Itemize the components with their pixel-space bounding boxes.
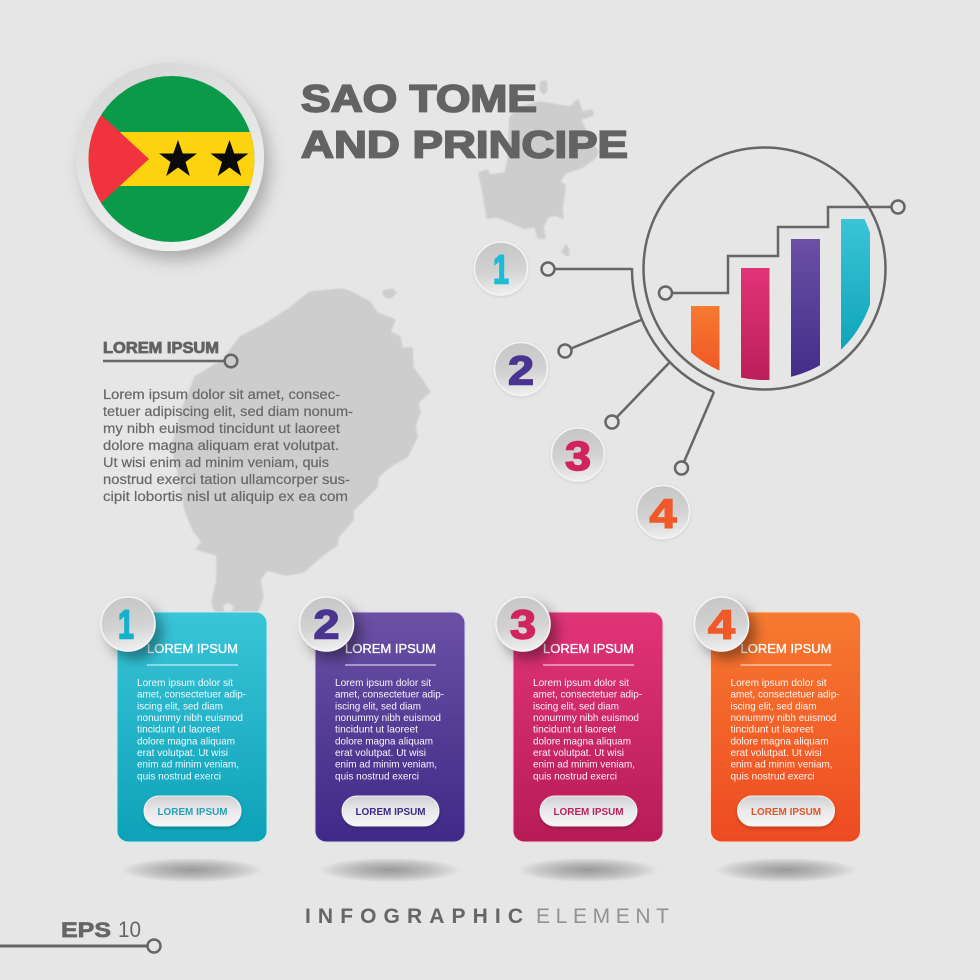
card text: nonummy nibh euismod [533, 713, 639, 724]
number badge 1 [474, 242, 528, 295]
card button: LOREM IPSUM [356, 807, 426, 818]
side paragraph [103, 387, 353, 504]
panel: card 1 [101, 597, 267, 883]
outer arc [632, 268, 714, 392]
card text: Lorem ipsum dolor sit [533, 678, 629, 689]
bars [691, 219, 870, 396]
card text: tincidunt ut laoreet [533, 725, 616, 736]
card button [540, 796, 637, 826]
stepped trend line [659, 200, 904, 300]
number badge 1: 1 [493, 246, 509, 292]
card text: quis nostrud exerci [137, 771, 221, 782]
card body [315, 612, 465, 842]
connector 2 [558, 320, 641, 358]
card text: amet, consectetuer adip- [533, 690, 642, 701]
card text [533, 678, 642, 782]
chart circle [644, 148, 886, 390]
card text: enim ad minim veniam, [137, 760, 239, 771]
footer caption: INFOGRAPHIC [305, 905, 523, 928]
card text: Lorem ipsum dolor sit [335, 678, 431, 689]
card text: iscing elit, sed diam [335, 701, 421, 712]
EPS 10 label with connector: 10 [118, 917, 141, 942]
card text: quis nostrud exerci [730, 771, 814, 782]
card text [335, 678, 444, 782]
side paragraph: dolore magna aliquam erat volutpat. [103, 438, 339, 453]
footer caption [305, 905, 669, 928]
EPS 10 label with connector [0, 917, 160, 952]
card text: dolore magna aliquam [730, 736, 828, 747]
card body [710, 612, 860, 842]
side heading with connector: LOREM IPSUM [103, 340, 219, 357]
card heading: LOREM IPSUM [345, 641, 436, 656]
title: AND PRINCIPE [301, 124, 628, 166]
bar chart in circle [644, 148, 904, 396]
card button [738, 796, 834, 826]
card button: LOREM IPSUM [158, 807, 228, 818]
floor shadow [118, 857, 266, 883]
card text: nonummy nibh euismod [335, 713, 441, 724]
card text: iscing elit, sed diam [730, 701, 816, 712]
card button [144, 796, 241, 826]
title [301, 78, 628, 166]
EPS 10 label with connector: EPS [61, 919, 111, 942]
side paragraph: nostrud exerci tation ullamcorper sus- [103, 472, 350, 487]
flag badge [76, 63, 264, 251]
card text: iscing elit, sed diam [533, 701, 619, 712]
card text: nonummy nibh euismod [137, 713, 243, 724]
card body [117, 612, 267, 842]
card number badge: 1 [118, 602, 134, 648]
side paragraph: my nibh euismod tincidunt ut laoreet [103, 421, 340, 436]
card text: dolore magna aliquam [137, 736, 235, 747]
card text [137, 678, 246, 782]
card number badge [300, 597, 354, 651]
card button: LOREM IPSUM [751, 807, 821, 818]
card text: quis nostrud exerci [335, 771, 419, 782]
card number badge [694, 597, 748, 651]
card body [513, 612, 663, 842]
card text: erat volutpat. Ut wisi [137, 748, 228, 759]
card text: enim ad minim veniam, [335, 760, 437, 771]
card text: tincidunt ut laoreet [335, 725, 418, 736]
side paragraph: tetuer adipiscing elit, sed diam nonum- [103, 404, 353, 419]
panel: card 4 [694, 597, 860, 883]
floor shadow [514, 857, 662, 883]
card number badge: 3 [510, 602, 536, 648]
card text: erat volutpat. Ut wisi [730, 748, 822, 759]
card text [730, 678, 840, 782]
card text: erat volutpat. Ut wisi [335, 748, 426, 759]
number badge 3 [552, 428, 604, 481]
card text: Lorem ipsum dolor sit [137, 678, 233, 689]
number badge 4: 4 [650, 490, 677, 536]
connector 3 [606, 363, 669, 428]
card heading: LOREM IPSUM [740, 641, 832, 656]
card text: dolore magna aliquam [335, 736, 433, 747]
map: Sao Tome island [172, 289, 430, 612]
side paragraph: cipit lobortis nisl ut aliquip ex ea com [103, 489, 348, 504]
outer arc and connectors [542, 262, 714, 474]
card text: tincidunt ut laoreet [137, 725, 220, 736]
card text: nonummy nibh euismod [730, 713, 837, 724]
card number badge [496, 597, 550, 651]
card text: Lorem ipsum dolor sit [730, 678, 827, 689]
flag of Sao Tome and Principe [88, 76, 254, 242]
connector 1 [542, 262, 632, 276]
flag ring [76, 63, 264, 251]
map: Principe island [479, 81, 598, 256]
card text: dolore magna aliquam [533, 736, 631, 747]
number badge 2 [494, 342, 548, 396]
card number badge [101, 597, 155, 651]
side paragraph: Ut wisi enim ad minim veniam, quis [103, 455, 329, 470]
side paragraph: Lorem ipsum dolor sit amet, consec- [103, 387, 340, 402]
card text: quis nostrud exerci [533, 771, 617, 782]
card text: enim ad minim veniam, [730, 760, 832, 771]
card text: iscing elit, sed diam [137, 701, 223, 712]
card text: tincidunt ut laoreet [730, 725, 814, 736]
card number badge: 2 [314, 602, 340, 648]
side heading with connector [103, 340, 237, 367]
card text: amet, consectetuer adip- [335, 690, 444, 701]
footer caption: ELEMENT [536, 905, 669, 928]
panel: card 2 [300, 597, 465, 883]
floor shadow [712, 857, 860, 883]
card text: erat volutpat. Ut wisi [533, 748, 624, 759]
number badge 2: 2 [508, 348, 534, 394]
number badge 3: 3 [565, 433, 591, 479]
card text: amet, consectetuer adip- [730, 690, 840, 701]
card text: enim ad minim veniam, [533, 760, 635, 771]
floor shadow [316, 857, 464, 883]
card number badge: 4 [708, 602, 735, 648]
number badge 4 [636, 486, 690, 538]
card text: amet, consectetuer adip- [137, 690, 246, 701]
card heading: LOREM IPSUM [147, 641, 238, 656]
title: SAO TOME [301, 78, 537, 120]
card button [342, 796, 439, 826]
card button: LOREM IPSUM [554, 807, 624, 818]
card heading: LOREM IPSUM [543, 641, 634, 656]
panel: card 3 [496, 597, 663, 883]
connector 4 [675, 392, 714, 474]
